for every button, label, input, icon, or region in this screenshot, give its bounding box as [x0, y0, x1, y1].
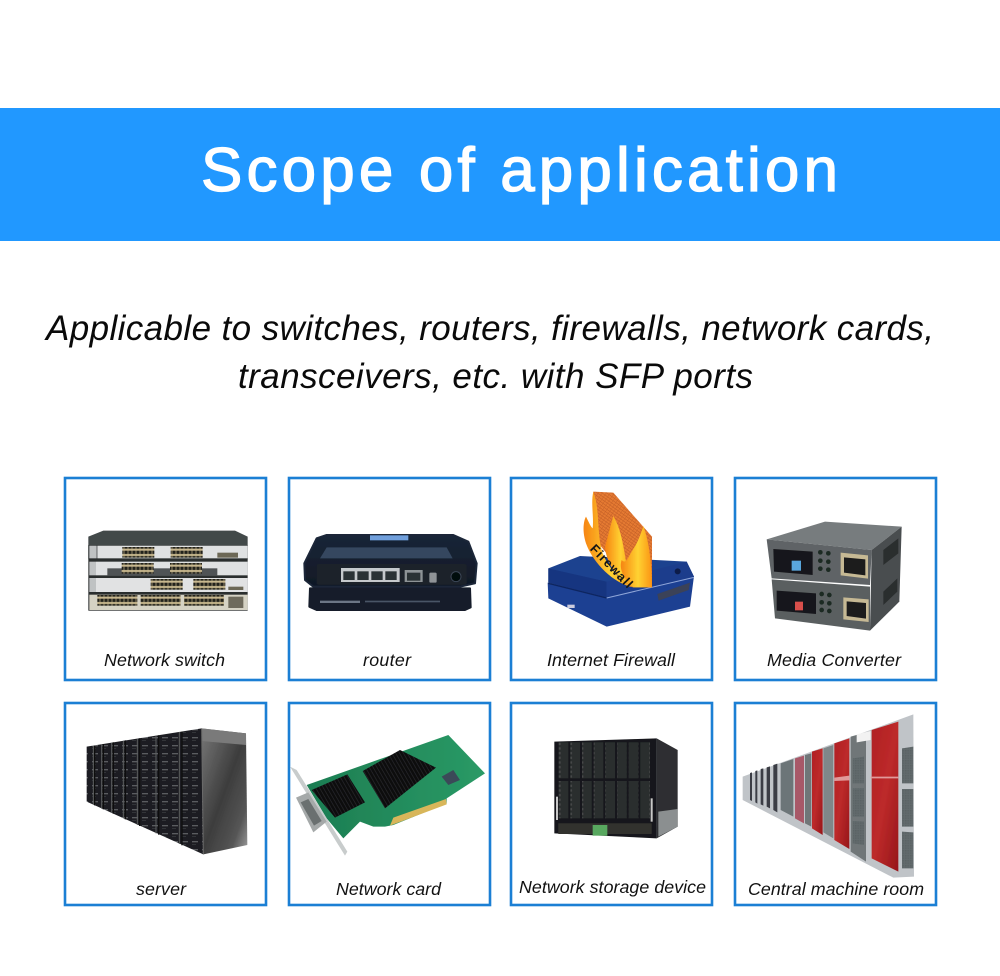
label: network card: Network card: [336, 879, 442, 899]
panel: network storage device: [511, 703, 712, 905]
icon: firewall: Firewall: [587, 542, 635, 591]
icon: network switch: [88, 531, 248, 611]
panel: network switch: [65, 478, 266, 680]
panel: server: [65, 703, 266, 905]
panel: network card: [289, 703, 490, 905]
intro text: transceivers, etc. with SFP ports: [238, 357, 753, 396]
intro text: [44, 309, 934, 396]
panel: central machine room: [735, 703, 936, 905]
icon: server racks: [87, 728, 247, 854]
icon: media converter: [767, 522, 902, 631]
panel: internet firewall: [511, 478, 712, 680]
icon: machine room: [743, 714, 914, 878]
label: network storage device: Network storage device: [519, 877, 706, 897]
label: internet firewall: Internet Firewall: [547, 650, 676, 670]
title banner: [0, 108, 1000, 241]
icon: firewall: [548, 492, 694, 627]
label: central machine room: Central machine room: [748, 879, 924, 899]
title: Scope of application: [201, 136, 838, 205]
label: server: server: [136, 879, 187, 899]
icon: storage chassis: [554, 738, 678, 838]
intro text: Applicable to switches, routers, firewalls, network cards,: [44, 309, 934, 348]
panel: media converter: [735, 478, 936, 680]
panel: router: [289, 478, 490, 680]
label: media converter: Media Converter: [767, 650, 902, 670]
icon: network card: [290, 735, 485, 856]
label: network switch: Network switch: [104, 650, 225, 670]
label: router: router: [363, 650, 412, 670]
icon: router: [304, 535, 477, 610]
